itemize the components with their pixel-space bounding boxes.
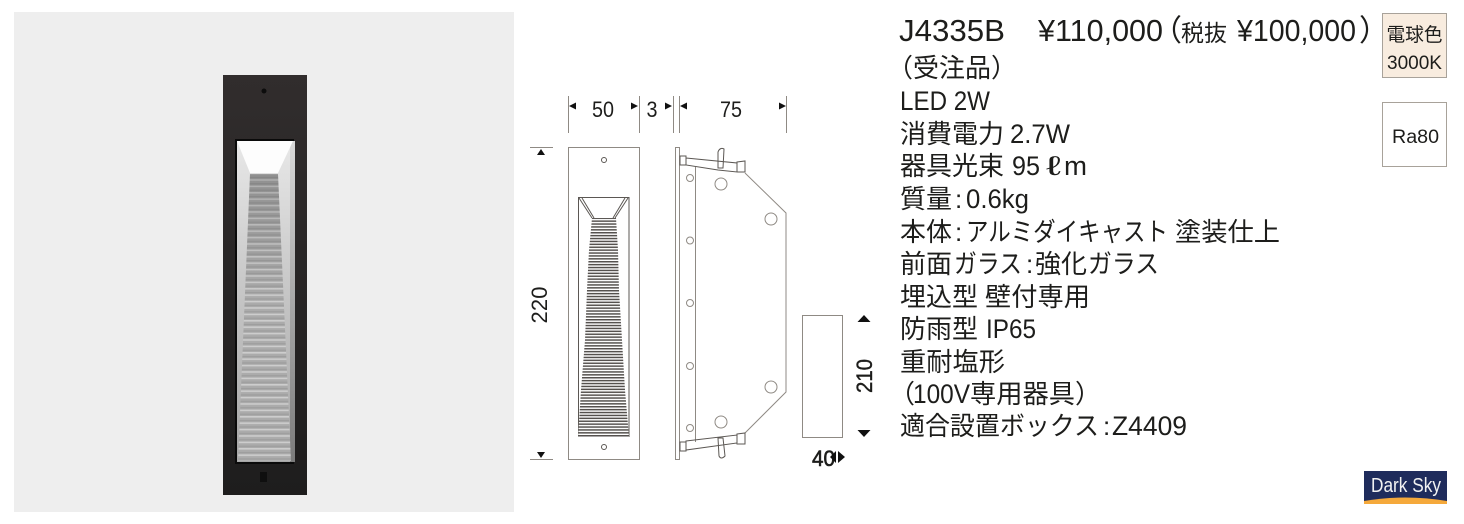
text block: specifications: （受注品） xyxy=(887,53,1017,83)
top bracket xyxy=(680,148,745,172)
text block: specifications: 埋込型 xyxy=(900,282,978,312)
screw hole xyxy=(262,88,266,94)
text block: specifications: 器具光束 xyxy=(900,151,1004,181)
panel: product photo xyxy=(14,12,514,512)
heading: model and price: （ xyxy=(1152,15,1182,48)
text block: specifications: 適合設置ボックス xyxy=(900,411,1099,441)
text block: specifications: 0.6kg xyxy=(966,184,1029,214)
text block: specifications: 前面 xyxy=(900,249,952,279)
text block: specifications: 消費電力 xyxy=(900,119,1004,149)
heading: model and price: ） xyxy=(1359,15,1389,48)
badge: color temperature: 3000K xyxy=(1387,53,1442,74)
text block: specifications: 強化 xyxy=(1035,249,1087,279)
drawing: mounting box: 40 xyxy=(812,446,835,471)
text block: specifications: ガラス xyxy=(1088,249,1159,279)
bottom screw mark xyxy=(260,472,267,482)
text block: specifications: 壁付専用 xyxy=(985,282,1090,312)
bottom bracket xyxy=(680,433,745,458)
heading: model and price xyxy=(899,13,1389,48)
text block: specifications: m xyxy=(1064,151,1087,181)
text block: specifications: ガラス xyxy=(954,249,1022,279)
dimension: height 220 xyxy=(527,148,553,460)
dimension: height 220: 220 xyxy=(527,286,552,324)
text block: specifications: LED 2W xyxy=(900,86,990,116)
badge: Dark Sky: Dark Sky xyxy=(1371,475,1441,497)
badge: Ra80: Ra80 xyxy=(1392,127,1439,148)
text block: specifications: : xyxy=(955,184,962,214)
drawing: side view xyxy=(676,148,786,460)
text block: specifications: アルミダイキャスト xyxy=(966,217,1168,247)
text block: specifications: 2.7W xyxy=(1010,119,1070,149)
text block: specifications: : xyxy=(1026,249,1033,279)
text block: specifications: 防雨型 xyxy=(900,314,978,344)
text block: specifications: IP65 xyxy=(986,314,1036,344)
text block: specifications: ℓ xyxy=(1046,151,1061,181)
text block: specifications: 100V xyxy=(913,379,970,409)
heading: model and price: ¥100,000 xyxy=(1236,13,1356,48)
text block: specifications: 専用器具 xyxy=(970,379,1075,409)
badge: color temperature: 電球色 xyxy=(1386,24,1442,46)
text block: specifications: ） xyxy=(1075,379,1101,409)
text block: specifications: : xyxy=(1103,411,1110,441)
text block: specifications: 95 xyxy=(1012,151,1040,181)
fixture body xyxy=(223,75,307,495)
drawing: front view xyxy=(568,148,640,460)
badge: Dark Sky xyxy=(1364,471,1447,504)
drawing: mounting box xyxy=(802,315,877,471)
dimensions: top width labels xyxy=(568,96,786,133)
text block: specifications: Z4409 xyxy=(1112,411,1187,441)
text block: specifications: 質量 xyxy=(900,184,952,214)
text block: specifications xyxy=(887,53,1280,441)
text block: specifications: 塗装仕上 xyxy=(1175,217,1280,247)
text block: specifications: 重耐塩形 xyxy=(900,347,1005,377)
badge: Ra80 xyxy=(1382,102,1446,166)
heading: model and price: 税抜 xyxy=(1181,20,1227,46)
recessed window xyxy=(235,139,295,464)
text block: specifications: : xyxy=(955,217,962,247)
dimensions: top width labels: 3 xyxy=(646,97,658,122)
text block: specifications: 本体 xyxy=(900,217,952,247)
badge: color temperature xyxy=(1382,14,1446,78)
heading: model and price: J4335B xyxy=(899,13,1005,48)
dimensions: top width labels: 50 xyxy=(592,97,614,122)
text block: specifications: （ xyxy=(889,379,915,409)
drawing: mounting box: 210 xyxy=(852,359,877,393)
heading: model and price: ¥110,000 xyxy=(1037,13,1163,48)
dimensions: top width labels: 75 xyxy=(720,97,742,122)
